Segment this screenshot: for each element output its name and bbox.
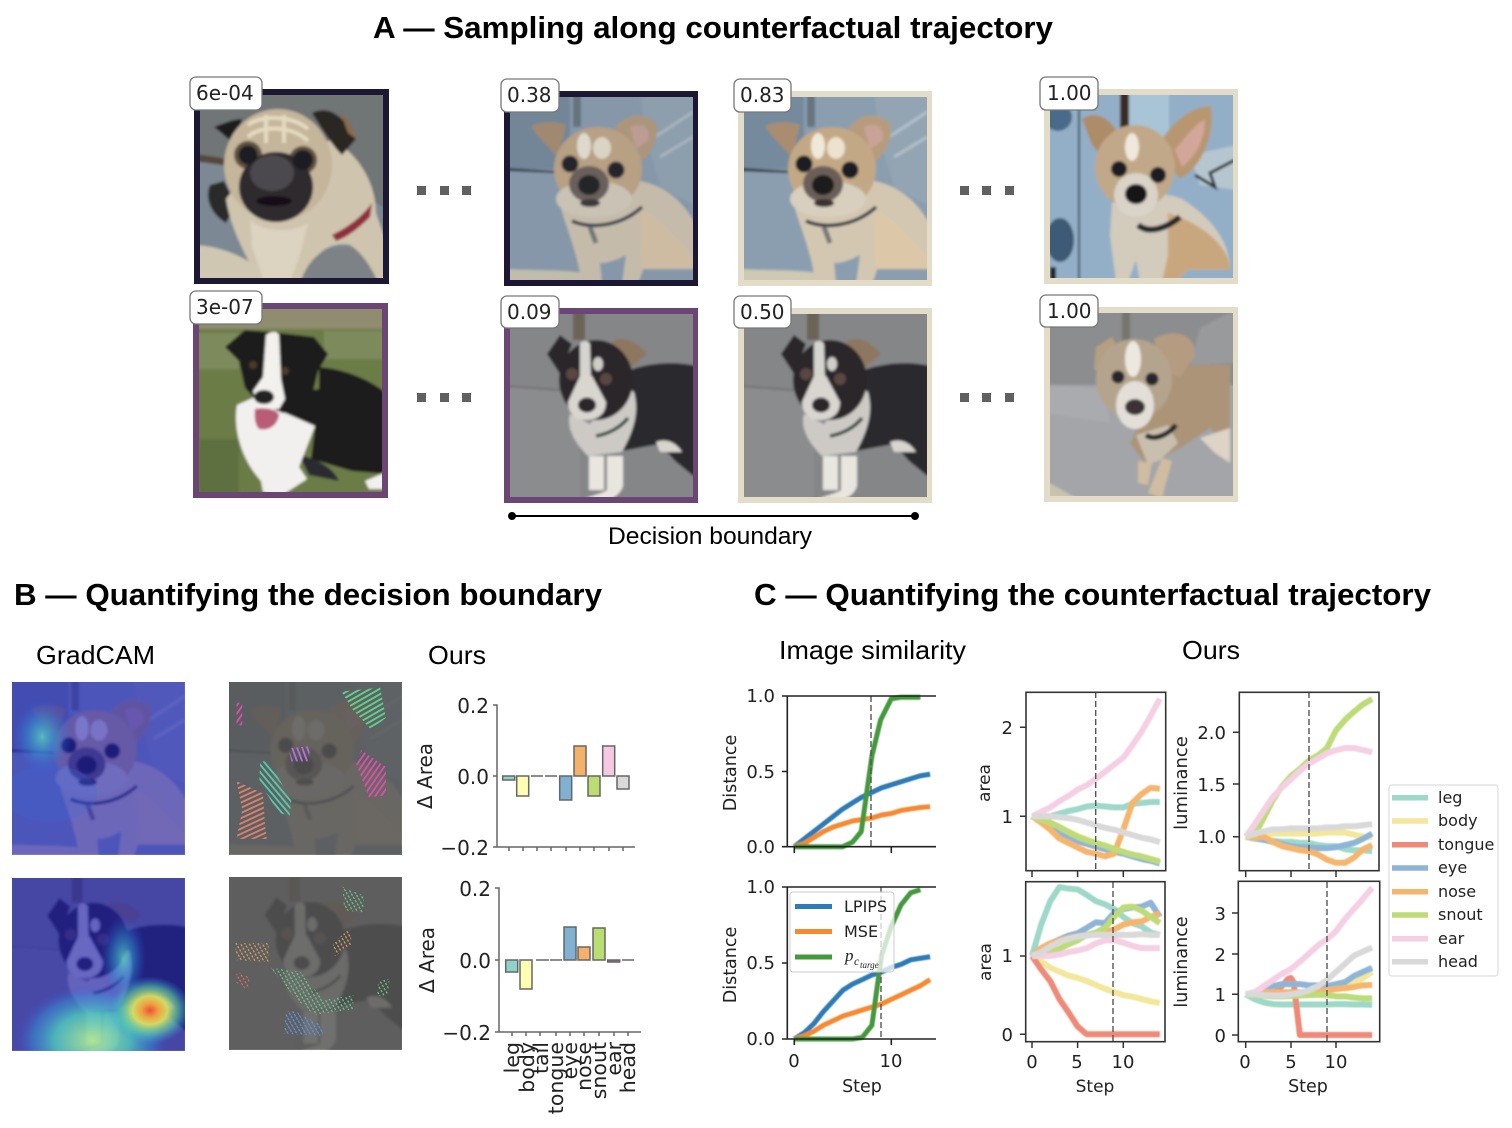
ellipsis dots row 1 left [417, 186, 471, 195]
category labels: tongue [544, 1042, 568, 1114]
line chart: part luminance, top: 1.0 [1197, 827, 1226, 848]
axis titles [1172, 916, 1328, 1097]
bar chart: top delta area: −0.2 [440, 836, 489, 860]
line chart: part area, top: 1 [1002, 807, 1013, 828]
decision boundary bracket [508, 512, 919, 550]
axis titles: Distance [721, 927, 741, 1003]
score label [734, 79, 791, 112]
score label [501, 296, 559, 328]
title: panel C: C — Quantifying the counterfactual trajectory [754, 577, 1432, 612]
legend: parts: body [1438, 811, 1478, 830]
bar chart: top delta area: 0.0 [457, 765, 489, 789]
category labels: leg [500, 1042, 524, 1073]
axes [495, 888, 641, 1036]
line chart: part luminance, bottom: 1 [1215, 985, 1226, 1006]
score label [501, 79, 559, 112]
category labels [500, 1041, 640, 1114]
image: chihuahua, score 1.00 [1040, 77, 1238, 284]
bar chart: top delta area [413, 694, 635, 860]
category labels: nose [572, 1042, 596, 1091]
line chart: part luminance, bottom: 3 [1215, 904, 1226, 925]
score label: 1.00 [1047, 81, 1092, 105]
legend: parts: head [1438, 952, 1478, 971]
line chart: distance, bottom [721, 877, 936, 1097]
line chart: distance, bottom: 0 [788, 1051, 800, 1072]
legend: parts: snout [1438, 905, 1483, 924]
legend: LPIPS [844, 897, 887, 916]
line chart: part area, bottom: 10 [1112, 1052, 1134, 1073]
series: parts [1246, 888, 1372, 1035]
image: intermediate dog, score 0.83 [734, 79, 932, 286]
image: tan dog, score 1.00 [1040, 295, 1238, 502]
series: parts [1246, 699, 1372, 863]
image: border collie, score 3e-07 [190, 291, 388, 498]
axis titles: luminance [1172, 916, 1192, 1008]
image: intermediate dog, score 0.09 [501, 296, 698, 503]
line chart: part area, bottom: 0 [1026, 1052, 1038, 1073]
frame [1026, 882, 1165, 1042]
title: panel A: A — Sampling along counterfactual trajectory [373, 10, 1054, 45]
score label [734, 296, 791, 328]
axes [782, 887, 936, 1045]
category labels: ear [602, 1041, 626, 1076]
line chart: distance, top: 0.0 [746, 837, 775, 858]
line chart: part area, top: 2 [1002, 718, 1013, 739]
axis titles: Step [1288, 1077, 1328, 1097]
bar chart: bottom delta area: −0.2 [442, 1021, 491, 1045]
line chart: part area, top [975, 692, 1166, 877]
score label: 0.50 [740, 300, 785, 324]
legend: parts [1389, 785, 1498, 976]
axis titles: area [976, 943, 996, 981]
decision boundary caption: Decision boundary [608, 523, 812, 550]
line chart: part area, bottom: 0 [1002, 1025, 1013, 1046]
axes [782, 696, 936, 853]
line chart: distance, bottom: 0.5 [746, 953, 775, 974]
score label: 6e-04 [196, 81, 254, 105]
legend: parts: eye [1438, 858, 1467, 877]
GradCAM heatmap, top [12, 682, 185, 855]
line chart: part luminance, bottom: 0 [1239, 1052, 1251, 1073]
axis title: Δ Area [415, 927, 439, 993]
image: intermediate dog, score 0.38 [501, 79, 698, 286]
axis title: Δ Area [413, 743, 437, 809]
axis titles: Step [1076, 1077, 1114, 1097]
image: pug, score 6e-04 [190, 77, 389, 284]
legend: c [854, 954, 860, 968]
line chart: part area, bottom: 5 [1071, 1052, 1083, 1073]
heading: GradCAM: GradCAM [36, 640, 155, 670]
axis title: area [975, 764, 995, 802]
series: LPIPS, MSE, p target [794, 697, 930, 847]
legend: p [844, 946, 854, 965]
axes [493, 705, 635, 851]
legend: targe [860, 960, 879, 970]
feature attribution map, bottom [225, 873, 406, 1054]
category labels: eye [558, 1042, 582, 1079]
line chart: part luminance, bottom: 2 [1215, 945, 1226, 966]
frame [1239, 692, 1379, 871]
line chart: part luminance, bottom: 0 [1215, 1026, 1226, 1047]
series: parts [1032, 699, 1160, 863]
line chart: distance, top [721, 686, 936, 858]
score label [1040, 77, 1098, 110]
series: parts [1032, 887, 1160, 1034]
legend: parts: ear [1438, 929, 1465, 948]
line chart: part luminance, top: 2.0 [1197, 723, 1226, 744]
axis titles [721, 927, 882, 1097]
score label: 0.83 [740, 83, 785, 107]
score label: 1.00 [1047, 299, 1092, 323]
score label: 0.38 [507, 83, 552, 107]
legend: MSE [844, 922, 878, 941]
line chart: part luminance, top: 1.5 [1197, 775, 1226, 796]
heading: Image similarity: Image similarity [779, 635, 966, 665]
bars [506, 927, 634, 989]
line chart: part luminance, bottom: 5 [1285, 1052, 1297, 1073]
ellipsis dots row 1 right [960, 186, 1014, 195]
category labels: body [515, 1042, 539, 1093]
line chart: distance, bottom: 0.0 [746, 1029, 775, 1050]
line chart: distance, top: 1.0 [746, 686, 775, 707]
line chart: part luminance, bottom: 10 [1325, 1052, 1347, 1073]
category labels: tail [529, 1042, 553, 1074]
heading: Ours (panel B): Ours [428, 640, 486, 670]
axis titles [976, 943, 1114, 1097]
line chart: distance, top: 0.5 [746, 762, 775, 783]
line chart: part area, bottom [976, 882, 1165, 1097]
title: panel B: B — Quantifying the decision boundary [14, 577, 603, 612]
axis title: luminance [1171, 736, 1192, 830]
score label [190, 291, 262, 324]
legend [790, 892, 894, 972]
ellipsis dots row 2 left [417, 393, 471, 402]
bar chart: top delta area: 0.2 [457, 694, 489, 718]
legend: parts: tongue [1438, 835, 1494, 854]
frame [1238, 881, 1380, 1042]
feature attribution map, top [225, 678, 406, 859]
line chart: part luminance, bottom [1172, 881, 1380, 1097]
frame [1026, 692, 1166, 871]
bar chart: bottom delta area: 0.0 [459, 949, 491, 973]
bar chart: bottom delta area: 0.2 [459, 877, 491, 901]
GradCAM heatmap, bottom [12, 878, 185, 1051]
score label: 0.09 [507, 300, 552, 324]
score label [190, 77, 262, 110]
category labels: snout [587, 1042, 611, 1099]
line chart: distance, bottom: 1.0 [746, 877, 775, 898]
category labels: head [616, 1042, 640, 1093]
ellipsis dots row 2 right [960, 393, 1014, 402]
score label [1040, 295, 1098, 327]
line chart: distance, bottom: 10 [880, 1051, 902, 1072]
image: intermediate dog, score 0.50 [734, 296, 932, 503]
legend: parts: leg [1438, 788, 1462, 807]
series: LPIPS, MSE, p target [794, 890, 930, 1039]
line chart: part area, bottom: 1 [1002, 946, 1013, 967]
heading: Ours (panel C): Ours [1182, 635, 1240, 665]
bar chart: bottom delta area [415, 877, 641, 1114]
score label: 3e-07 [196, 295, 254, 319]
axis titles: Step [842, 1077, 882, 1097]
legend: parts: nose [1438, 882, 1476, 901]
bars [503, 746, 629, 800]
line chart: part luminance, top [1171, 692, 1379, 877]
axis title: Distance [721, 735, 741, 811]
